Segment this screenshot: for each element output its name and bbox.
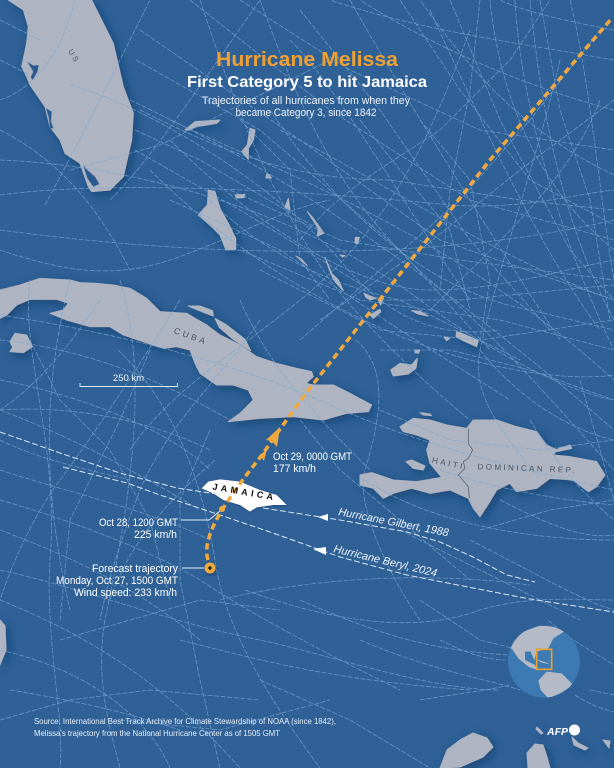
Cuba	[0, 278, 372, 422]
Hurricane Gilbert track	[0, 432, 535, 582]
coastal bays	[27, 62, 99, 187]
start marker	[204, 562, 216, 574]
title: Hurricane Melissa	[216, 49, 399, 71]
description: Trajectories of all hurricanes from when they	[202, 95, 410, 107]
track arrow: Gilbert	[318, 514, 328, 521]
label: Oct 28	[99, 517, 178, 541]
AFP logo	[546, 724, 580, 738]
label: Hurricane Beryl: Hurricane Beryl, 2024	[332, 543, 438, 580]
Jamaica	[202, 479, 287, 512]
globe locator box	[537, 649, 552, 669]
dashed track	[207, 18, 612, 560]
description: became Category 3, since 1842	[236, 107, 376, 119]
label: Oct 29: Oct 29, 0000 GMT	[273, 451, 352, 463]
scale label: 250 km	[113, 373, 144, 384]
locator globe	[508, 626, 580, 698]
Hurricane Beryl track	[63, 467, 614, 612]
label: Jamaica: JAMAICA	[212, 481, 277, 503]
label: Oct 28: Oct 28, 1200 GMT	[99, 517, 178, 529]
mid arrow	[258, 449, 267, 461]
label: forecast: Forecast trajectory	[92, 563, 178, 575]
label: Oct 28: 225 km/h	[134, 529, 177, 541]
label: Cuba: CUBA	[173, 325, 209, 347]
subtitle: First Category 5 to hit Jamaica	[187, 74, 427, 91]
AFP dot	[569, 724, 580, 736]
globe land	[508, 626, 573, 698]
label: Dominican Republic: DOMINICAN REP.	[477, 462, 577, 475]
Haiti border	[458, 428, 473, 498]
source note	[34, 716, 336, 738]
Oct 28 marker	[219, 506, 225, 512]
Florida	[8, 0, 133, 192]
scale bar	[80, 373, 178, 386]
description	[202, 95, 410, 119]
label: Oct 29	[273, 451, 352, 475]
label: Hurricane Gilbert: Hurricane Gilbert, 1988	[337, 506, 451, 539]
southern islands	[440, 727, 610, 768]
western edge land	[0, 620, 6, 665]
large arrow	[266, 427, 280, 447]
Hispaniola	[360, 413, 605, 517]
label: forecast: Monday, Oct 27, 1500 GMT	[56, 575, 178, 587]
label: forecast	[56, 563, 178, 599]
Bahamas	[185, 120, 478, 376]
leader lines	[181, 511, 220, 568]
label: US: US	[66, 48, 82, 65]
source note: Melissa’s trajectory from the National Hurricane Center as of 1505 GMT	[34, 728, 280, 738]
source note: Source: International Best Track Archive for Climate Stewardship of NOAA (since 1842),	[34, 716, 336, 726]
label: Haiti: HAITI	[431, 456, 466, 471]
track arrow: Beryl	[313, 547, 326, 555]
label: forecast: Wind speed: 233 km/h	[74, 587, 177, 599]
AFP wordmark: AFP	[546, 726, 569, 738]
globe disc	[508, 626, 580, 698]
Melissa forecast trajectory	[204, 18, 612, 574]
label: Oct 29: 177 km/h	[273, 463, 316, 475]
